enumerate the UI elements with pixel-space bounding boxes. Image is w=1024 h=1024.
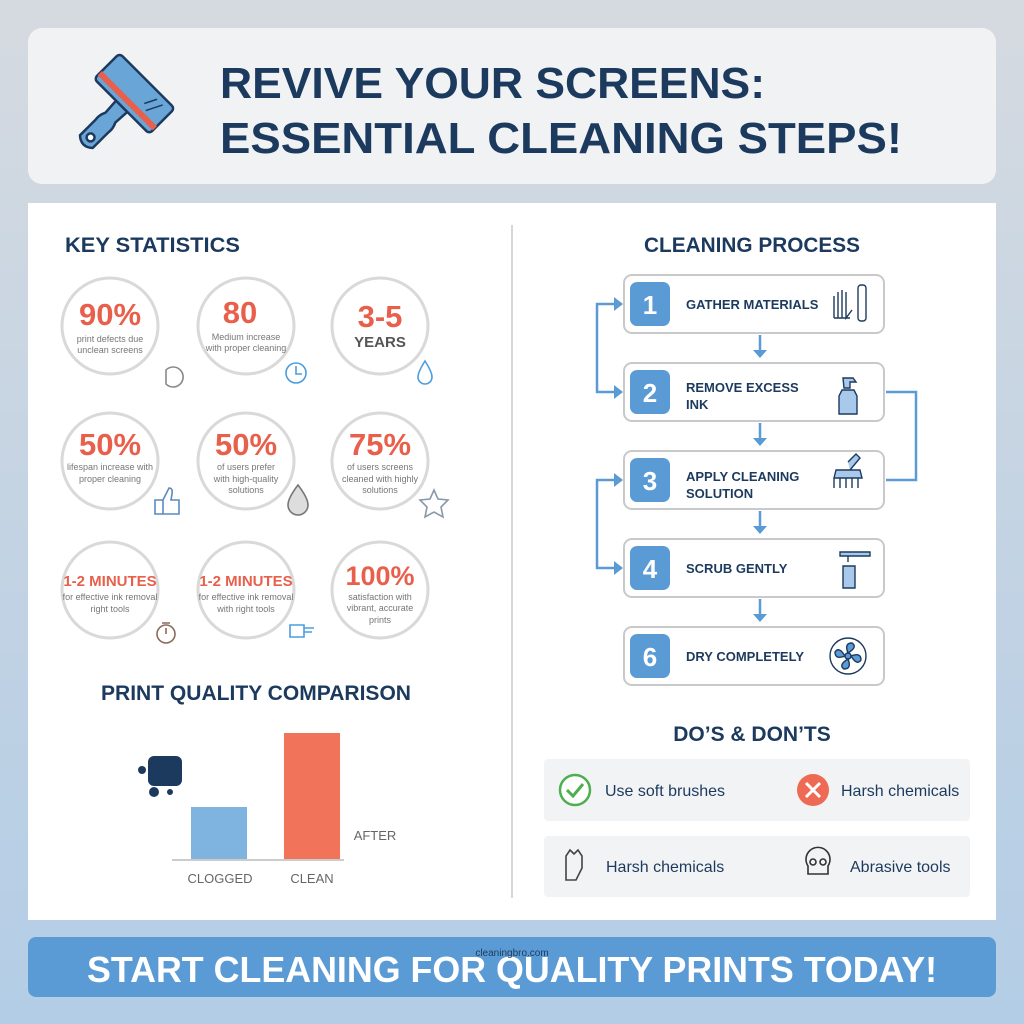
process steps: REMOVE EXCESS xyxy=(686,380,799,395)
stats grid: 100% xyxy=(345,561,415,591)
stats grid: 3-5 xyxy=(358,299,402,334)
stats grid: 90% xyxy=(79,297,141,332)
process steps: INK xyxy=(686,397,709,412)
dos and donts cards: Harsh chemicals xyxy=(606,859,724,876)
stats grid: with right tools xyxy=(216,604,275,614)
process steps: 4 xyxy=(643,554,658,584)
heading: print quality comparison: PRINT QUALITY COMPARISON xyxy=(101,682,411,705)
process steps: 2 xyxy=(643,378,657,408)
stats grid: with high-quality xyxy=(213,474,279,484)
stats grid: 1-2 MINUTES xyxy=(63,573,157,590)
stats grid: lifespan increase with xyxy=(67,462,153,472)
stats grid: 75% xyxy=(349,427,411,462)
stats grid: with proper cleaning xyxy=(205,343,286,353)
arrows xyxy=(597,297,916,622)
footer banner: cleaningbro.com xyxy=(475,948,549,959)
main panel xyxy=(28,203,996,920)
icon: ink splat xyxy=(138,756,182,797)
title: ESSENTIAL CLEANING STEPS! xyxy=(220,114,902,163)
dos and donts cards: Use soft brushes xyxy=(605,783,725,800)
stats grid: satisfaction with xyxy=(348,592,412,602)
dos and donts cards: Harsh chemicals xyxy=(841,783,959,800)
process steps: 3 xyxy=(643,466,657,496)
stats grid: print defects due xyxy=(77,334,143,344)
title: REVIVE YOUR SCREENS: xyxy=(220,59,765,108)
stats grid: Medium increase xyxy=(212,332,280,342)
small icons xyxy=(155,361,448,643)
stats grid: of users screens xyxy=(347,462,414,472)
dos and donts cards xyxy=(544,759,970,897)
stats grid: 50% xyxy=(215,427,277,462)
process steps: APPLY CLEANING xyxy=(686,469,799,484)
process steps: GATHER MATERIALS xyxy=(686,297,819,312)
stats grid: for effective ink removal xyxy=(63,592,157,602)
stats grid: unclean screens xyxy=(77,345,143,355)
footer banner: START CLEANING FOR QUALITY PRINTS TODAY! xyxy=(87,949,937,990)
stats grid: prints xyxy=(369,615,392,625)
stats grid: right tools xyxy=(90,604,130,614)
process steps: SOLUTION xyxy=(686,486,753,501)
footer banner xyxy=(28,937,996,997)
stats grid: cleaned with highly xyxy=(342,474,419,484)
stats grid: solutions xyxy=(362,485,398,495)
stats grid: for effective ink removal xyxy=(199,592,293,602)
dos and donts cards: Abrasive tools xyxy=(850,859,950,876)
icons xyxy=(830,285,870,674)
stats grid: of users prefer xyxy=(217,462,275,472)
bar chart: CLEAN xyxy=(290,871,334,886)
stats grid: solutions xyxy=(228,485,264,495)
bar chart: CLOGGED xyxy=(187,871,253,886)
header card xyxy=(28,28,996,184)
icon: scraper xyxy=(56,53,175,172)
process steps: 6 xyxy=(643,642,657,672)
process steps: DRY COMPLETELY xyxy=(686,649,804,664)
heading: cleaning process: CLEANING PROCESS xyxy=(644,234,860,257)
stats grid xyxy=(62,278,448,643)
process steps: 1 xyxy=(643,290,657,320)
heading: key statistics: KEY STATISTICS xyxy=(65,234,240,257)
stats grid: vibrant, accurate xyxy=(347,603,413,613)
stats grid: 1-2 MINUTES xyxy=(199,573,293,590)
bar chart xyxy=(138,733,396,886)
bar chart: AFTER xyxy=(354,828,396,843)
stats grid: proper cleaning xyxy=(79,474,141,484)
stats grid: YEARS xyxy=(354,334,406,351)
stats grid: 50% xyxy=(79,427,141,462)
stats grid: 80 xyxy=(223,295,257,330)
process steps: SCRUB GENTLY xyxy=(686,561,788,576)
title xyxy=(220,59,902,163)
heading: dos and donts: DO’S & DON’TS xyxy=(673,723,831,746)
process steps xyxy=(624,275,884,685)
